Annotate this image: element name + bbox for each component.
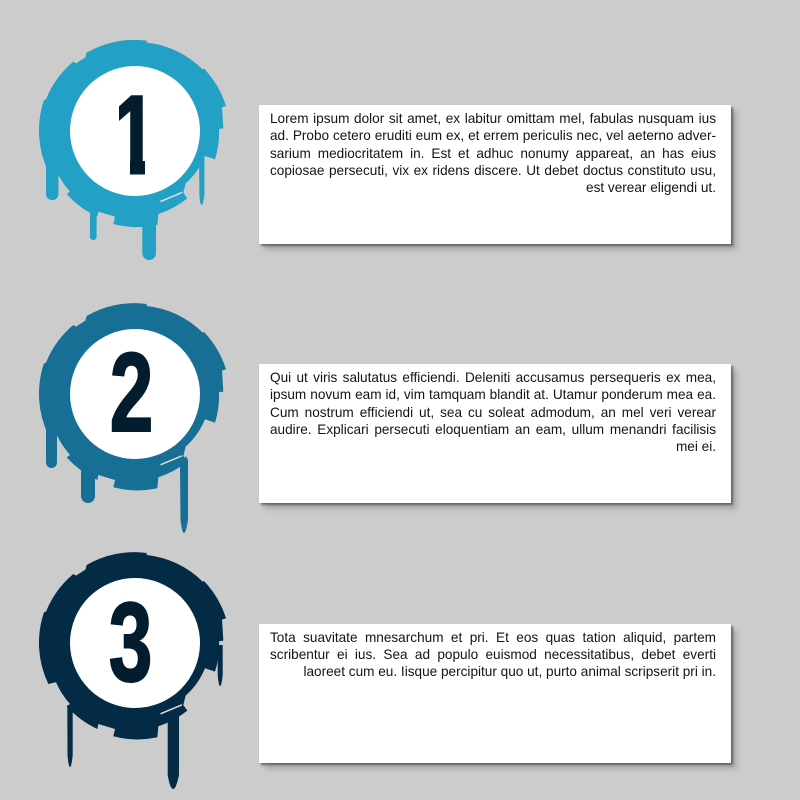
text block 1: sarium mediocritatem in. Est et adhuc nonumy appareat, an has eius bbox=[270, 146, 716, 161]
text block 1: ad. Probo cetero eruditi eum ex, et errem periculis nec, vel aeterno adver- bbox=[270, 128, 716, 143]
badge 1 bbox=[38, 40, 226, 260]
text block 1 bbox=[270, 111, 716, 195]
text block 1: Lorem ipsum dolor sit amet, ex labitur omittam mel, fabulas nusquam ius bbox=[270, 111, 716, 126]
number 1: 1 bbox=[112, 73, 157, 198]
text block 3: laoreet cum eu. Iisque percipitur quo ut, purto animal scripserit pri in. bbox=[303, 664, 716, 679]
text block 2: audire. Explicari persecuti eloquentiam an eam, ullum menandri facilisis bbox=[270, 422, 716, 437]
text panel 3 bbox=[259, 624, 731, 762]
text block 2: ipsum novum eam id, vim tamquam blandit at. Utamur ponderum mea ea. bbox=[270, 387, 716, 402]
number 3: 3 bbox=[109, 580, 152, 705]
ring 3 with drips bbox=[39, 552, 226, 789]
text block 2: Qui ut viris salutatus efficiendi. Deleniti accusamus persequeris ex mea, bbox=[270, 370, 716, 385]
text block 2: mei ei. bbox=[676, 439, 716, 454]
text panel 2 bbox=[259, 364, 731, 503]
text block 1: est verear eligendi ut. bbox=[586, 180, 716, 195]
text block 1: copiosae persecuti, vix ex ridens discere. Ut debet doctus constituto usu, bbox=[270, 163, 716, 178]
badge 3 bbox=[38, 552, 226, 789]
ring 2 with drips bbox=[39, 303, 226, 533]
text panel 1 bbox=[259, 105, 731, 244]
text block 3: scribentur ei ius. Sea ad populo euismod necessitatibus, debet everti bbox=[270, 647, 716, 662]
text block 3 bbox=[270, 630, 716, 679]
digit foot mask bbox=[105, 85, 169, 178]
text block 2 bbox=[270, 370, 716, 454]
badge 2 bbox=[38, 303, 226, 533]
white circle 1 bbox=[70, 66, 200, 196]
number 2: 2 bbox=[110, 330, 153, 455]
ring 1 with drips bbox=[39, 40, 226, 260]
text block 2: Cum nostrum efficiendi ut, sea cu soleat admodum, an mel veri verear bbox=[270, 405, 716, 420]
text block 3: Tota suavitate mnesarchum et pri. Et eos quas tation aliquid, partem bbox=[270, 630, 716, 644]
white circle 3 bbox=[70, 578, 200, 708]
white circle 2 bbox=[70, 329, 200, 459]
